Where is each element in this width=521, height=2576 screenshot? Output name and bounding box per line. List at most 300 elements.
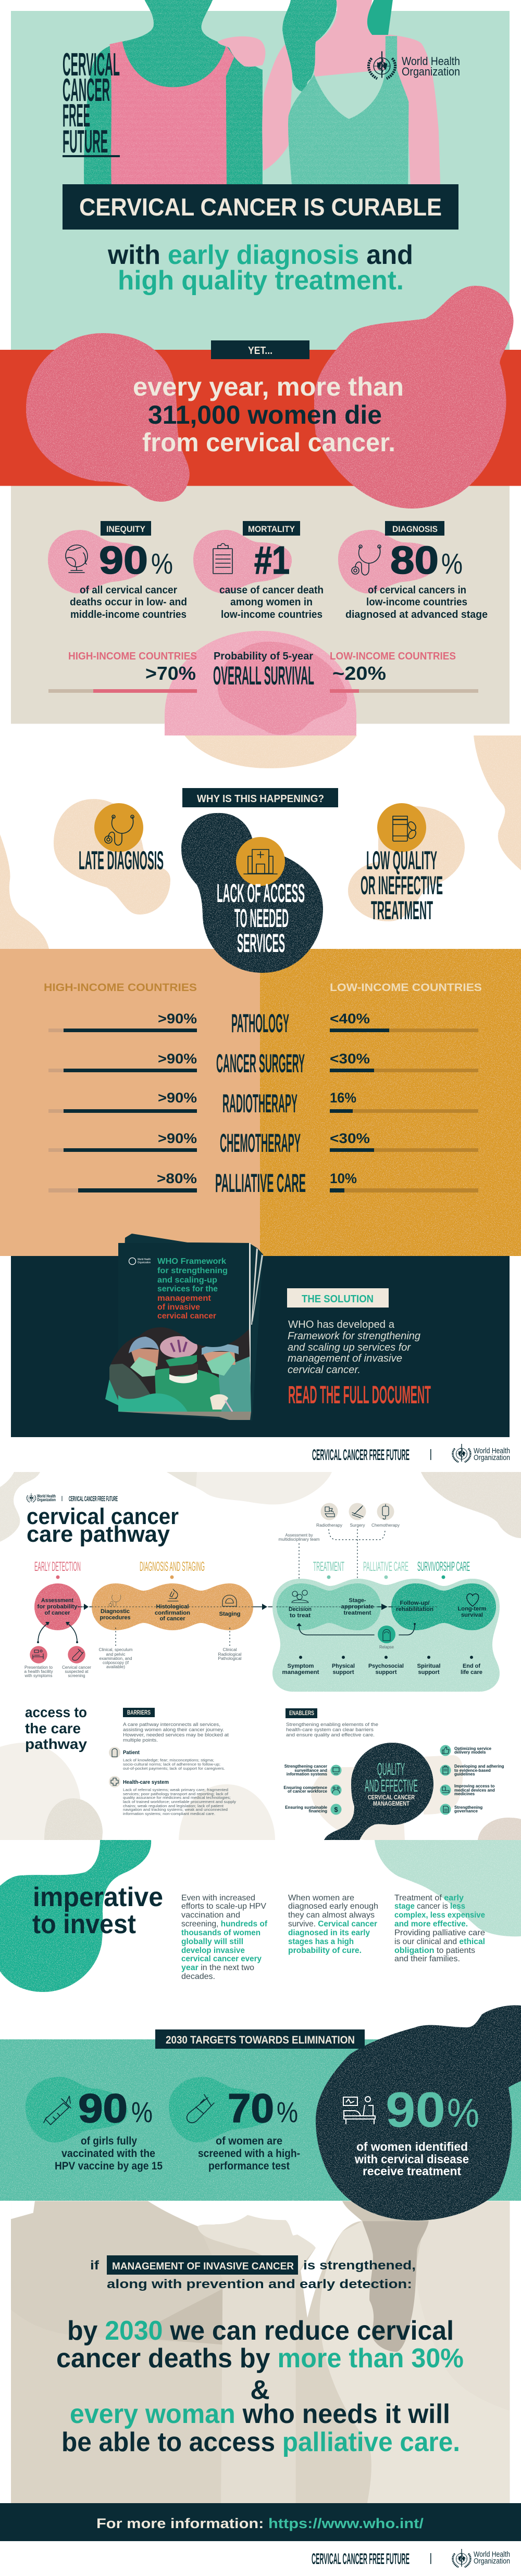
row: chemotherapy xyxy=(48,1128,478,1158)
yet tag xyxy=(211,340,309,359)
section: closing beige panel xyxy=(0,2005,521,2568)
stat: inequity: 90 xyxy=(99,538,148,582)
icon: radiotherapy machine xyxy=(325,1507,334,1517)
captions: Presentation to xyxy=(24,1665,53,1670)
stat: diagnosis: 80 xyxy=(390,538,439,582)
treatment, palliative and survivorship blob: treatment xyxy=(344,1610,371,1616)
conditional statement: along with prevention and early detection: xyxy=(107,2277,412,2291)
book title: services for the xyxy=(157,1285,218,1293)
invest title xyxy=(32,1882,163,1939)
palliative care items xyxy=(282,1656,482,1676)
book teal wave xyxy=(118,1393,188,1412)
enabler items right: Developing and adhering xyxy=(454,1764,504,1769)
row: pathology xyxy=(48,1009,478,1038)
stage headers: PALLIATIVE CARE xyxy=(363,1559,408,1574)
barrier: patient xyxy=(109,1747,225,1771)
treatment options xyxy=(278,1503,400,1588)
quality and effective blob xyxy=(324,1743,433,1840)
icon: stethoscope xyxy=(352,545,381,575)
bar: high income survival xyxy=(48,689,197,693)
stat: diagnosis: % xyxy=(441,547,463,580)
enabler items right: to evidence-based xyxy=(454,1768,491,1773)
barrier: health-care system: Health-care system xyxy=(123,1779,169,1785)
row: cancer surgery: >90% xyxy=(158,1051,197,1067)
book title: cervical cancer xyxy=(157,1312,216,1321)
stat: inequity: of all cervical cancer xyxy=(80,585,177,596)
dark blob: treatment target: receive treatment xyxy=(363,2164,461,2178)
book title: of invasive xyxy=(157,1303,200,1312)
light pink arch xyxy=(165,631,356,735)
cause: lack of access blob: TO NEEDED xyxy=(234,904,289,933)
small header xyxy=(27,1493,118,1503)
icon: heart xyxy=(467,1594,479,1606)
peach blob left edge xyxy=(0,834,49,949)
palliative care items: Physical xyxy=(332,1663,355,1669)
enabler items left: financing xyxy=(308,1809,327,1813)
icon: scalpel xyxy=(352,1506,363,1518)
stage headers: TREATMENT xyxy=(313,1559,344,1574)
text column 3: and their families. xyxy=(394,1955,460,1963)
enablers column: health-care system can clear barriers xyxy=(286,1727,374,1733)
captions: suspected at xyxy=(65,1669,89,1674)
early detection group: for probability xyxy=(38,1604,78,1610)
captions xyxy=(24,1665,91,1678)
dark blob: treatment target: % xyxy=(447,2090,479,2136)
icon: care team xyxy=(292,1590,308,1603)
stat: diagnosis: diagnosed at advanced stage xyxy=(345,609,488,620)
target: HPV vaccination xyxy=(26,2077,163,2172)
section: hero xyxy=(11,0,510,350)
barriers column: multiple points. xyxy=(123,1737,158,1743)
section: hero: CANCER xyxy=(63,72,110,108)
book title: for strengthening xyxy=(157,1266,228,1275)
footer strip with logo: World Health xyxy=(474,1446,510,1455)
quality and effective blob: MANAGEMENT xyxy=(373,1800,410,1807)
arrow: symptoms to assessment xyxy=(37,1622,49,1643)
section: survival comparison: LOW-INCOME COUNTRIES xyxy=(330,651,456,662)
barrier: patient: Patient xyxy=(123,1749,140,1756)
deaths statement text: from cervical cancer. xyxy=(142,428,395,457)
text column 3: complex, less expensive xyxy=(394,1911,485,1920)
text column 2: survive. Cervical cancer xyxy=(288,1920,377,1928)
section: survival comparison: Probability of 5-year xyxy=(214,651,313,662)
target: screening: performance test xyxy=(208,2160,290,2172)
icon: hospital xyxy=(244,849,277,874)
closing goals: be able to access palliative care. xyxy=(61,2427,460,2457)
enablers column: Strengthening enabling elements of the xyxy=(286,1722,378,1728)
cause: low quality treatment xyxy=(348,803,465,925)
deaths statement text: 311,000 women die xyxy=(148,400,382,429)
icon: globe xyxy=(66,545,88,573)
solution paragraph xyxy=(288,1319,420,1376)
solution tag xyxy=(287,1288,389,1308)
row: palliative care: PALLIATIVE CARE xyxy=(215,1169,306,1198)
WHO logo xyxy=(368,51,460,79)
palliative care items: support xyxy=(418,1669,440,1676)
text column 1: thousands of women xyxy=(181,1928,260,1937)
enabler items left: Strengthening cancer xyxy=(284,1764,327,1769)
treatment options: multidisciplinary team xyxy=(278,1537,320,1542)
stage headers: EARLY DETECTION xyxy=(34,1559,81,1574)
row: radiotherapy: >90% xyxy=(158,1090,197,1106)
stat: mortality xyxy=(193,521,324,620)
treatment, palliative and survivorship blob: appropriate xyxy=(341,1604,374,1610)
dark blob: treatment target: with cervical disease xyxy=(354,2152,469,2166)
barriers column xyxy=(109,1708,236,1816)
early detection group: Assessment xyxy=(41,1597,73,1604)
enabler items left: of cancer workforce xyxy=(288,1789,328,1794)
barrier: health-care system: information systems; non-compliant medical care. xyxy=(123,1811,215,1816)
early detection group: of cancer xyxy=(45,1610,70,1616)
section: survival comparison: >70% xyxy=(145,663,196,684)
target: HPV vaccination: of girls fully xyxy=(81,2135,137,2147)
enablers column: ENABLERS xyxy=(289,1709,314,1717)
stage headers xyxy=(34,1559,470,1579)
stat: inequity: % xyxy=(151,547,173,580)
bar: low income survival xyxy=(330,689,478,693)
target: HPV vaccination: % xyxy=(131,2096,153,2128)
text column 3: Providing palliative care xyxy=(394,1928,485,1937)
book logo xyxy=(129,1258,151,1265)
section: survival comparison: OVERALL SURVIVAL xyxy=(213,661,314,690)
diagnosis and staging group: Diagnostic xyxy=(101,1608,130,1615)
palliative care items: End of xyxy=(463,1663,480,1669)
barriers column: assisting women along their cancer journey. xyxy=(123,1727,224,1733)
stat: mortality: among women in xyxy=(230,597,313,608)
quality and effective blob: AND EFFECTIVE xyxy=(365,1776,418,1795)
small header: World Health xyxy=(37,1494,56,1499)
heading tag xyxy=(182,788,338,807)
stat: mortality: MORTALITY xyxy=(248,524,295,534)
solution tag: THE SOLUTION xyxy=(302,1293,374,1305)
cause: late diagnosis xyxy=(54,799,170,915)
enabler items right: governance xyxy=(454,1809,478,1813)
closing goals: cancer deaths by more than 30% xyxy=(56,2343,464,2374)
section: care pathway xyxy=(0,1472,521,1692)
captions: screening xyxy=(68,1673,85,1678)
barrier: health-care system: chains; weak regulation and legislation; lack of patient xyxy=(123,1804,224,1808)
campaign wordmark xyxy=(63,47,120,160)
row: pathology: PATHOLOGY xyxy=(231,1009,289,1038)
section: hero: CERVICAL xyxy=(63,47,120,83)
book title xyxy=(157,1257,228,1321)
icon: stethoscope xyxy=(109,1595,121,1607)
access title: the care xyxy=(25,1720,81,1736)
cause: lack of access blob: SERVICES xyxy=(237,929,285,958)
row: cancer surgery: CANCER SURGERY xyxy=(216,1049,305,1078)
stat: mortality: cause of cancer death xyxy=(219,585,324,596)
text column 1 xyxy=(181,1894,268,1981)
conditional statement: MANAGEMENT OF INVASIVE CANCER xyxy=(112,2261,294,2272)
icon: drip bag xyxy=(382,1504,389,1519)
barrier: patient: out-of-pocket payments; lack of support for caregivers. xyxy=(123,1766,225,1771)
row: chemotherapy: <30% xyxy=(330,1131,370,1146)
target: HPV vaccination: 90 xyxy=(78,2085,128,2131)
dark blob: treatment target xyxy=(316,2005,521,2220)
treatment options: Assessment by xyxy=(286,1533,313,1538)
diagnosis and staging group: Radiological xyxy=(218,1652,242,1657)
WHO framework book xyxy=(105,1234,263,1420)
enabler items left: Ensuring competence xyxy=(283,1785,328,1790)
diagnosis and staging group: procedures xyxy=(100,1615,130,1621)
headline banner xyxy=(63,184,458,230)
text column 3 xyxy=(394,1894,485,1963)
icon: stethoscope xyxy=(105,815,134,845)
text column 1: Even with increased xyxy=(181,1894,255,1902)
targets band xyxy=(0,2039,521,2201)
stat: mortality: low-income countries xyxy=(221,609,322,620)
arrow: assessment to diagnosis xyxy=(78,1604,92,1610)
book title: and scaling-up xyxy=(157,1276,217,1285)
enabler items left xyxy=(283,1764,342,1814)
enabler items right: Improving access to xyxy=(454,1784,494,1788)
text column 3: is our clinical and ethical xyxy=(394,1937,485,1946)
section: service availability comparison: LACK OF ACCESS xyxy=(217,879,305,908)
row: radiotherapy: RADIOTHERAPY xyxy=(222,1089,297,1118)
diagnosis and staging group: examination, and xyxy=(99,1656,132,1661)
text column 2: diagnosed early enough xyxy=(288,1902,378,1911)
row: palliative care: >80% xyxy=(157,1171,197,1186)
solution paragraph: management of invasive xyxy=(288,1353,402,1364)
stage headers: DIAGNOSIS AND STAGING xyxy=(140,1559,205,1574)
deaths statement text xyxy=(133,372,404,457)
row: chemotherapy: >90% xyxy=(158,1131,197,1146)
diagnosis and staging group: confirmation xyxy=(155,1610,190,1616)
book logo: World Health xyxy=(138,1258,151,1261)
target: screening: of women are xyxy=(216,2135,282,2147)
enabler items right: medicines xyxy=(454,1792,475,1796)
subheadline: with early diagnosis and xyxy=(107,240,413,270)
quality and effective blob: CERVICAL CANCER xyxy=(368,1794,415,1801)
arrow between treatment and survivorship xyxy=(378,1604,391,1610)
background circles xyxy=(0,1743,521,1840)
barriers column: A care pathway interconnects all services, xyxy=(123,1722,220,1728)
enabler items left: $ xyxy=(334,1806,338,1813)
conditional statement: is strengthened, xyxy=(303,2258,416,2273)
icon: presentation bed xyxy=(33,1650,43,1659)
pathway title: cervical cancer xyxy=(27,1504,179,1529)
invest title: to invest xyxy=(32,1909,136,1939)
red band xyxy=(0,350,521,486)
icon: syringe xyxy=(44,2096,71,2125)
captions: Cervical cancer xyxy=(62,1665,91,1670)
row: cancer surgery xyxy=(48,1049,478,1078)
more information bar: For more information: https://www.who.int/ xyxy=(96,2516,424,2531)
text column 3: obligation to patients xyxy=(394,1946,475,1955)
row: chemotherapy: CHEMOTHERAPY xyxy=(220,1128,301,1158)
subheadline xyxy=(107,240,413,296)
access title: access to xyxy=(25,1704,87,1720)
target: screening xyxy=(169,2077,300,2172)
icon: patient in bed xyxy=(343,2097,375,2124)
peach blob top xyxy=(184,735,357,768)
enabler items right: guidelines xyxy=(454,1772,475,1776)
barrier: health-care system: Lack of referral systems; weak primary care; fragmented xyxy=(123,1787,228,1792)
palliative care items: management xyxy=(282,1669,319,1676)
diagnosis and staging group: available) xyxy=(106,1665,125,1669)
icon: test tube xyxy=(72,1649,83,1660)
section: survival comparison: ~20% xyxy=(332,663,386,684)
arrow: staging to treatment xyxy=(253,1604,276,1610)
text column 3: and more effective. xyxy=(394,1920,468,1928)
diagnosis and staging group: Staging xyxy=(219,1611,241,1617)
deaths statement text: every year, more than xyxy=(133,372,404,401)
stat: inequity: deaths occur in low- and xyxy=(70,597,187,608)
barrier: health-care system xyxy=(109,1776,236,1816)
early detection group xyxy=(24,1583,91,1678)
row: palliative care: 10% xyxy=(330,1171,357,1186)
pathway title xyxy=(27,1504,179,1547)
section: survival comparison xyxy=(48,631,478,735)
stat: inequity: middle-income countries xyxy=(70,609,187,620)
invest title: imperative xyxy=(33,1882,163,1912)
diagnosis and staging group: Clinical, speculum xyxy=(99,1647,133,1652)
target: screening: % xyxy=(277,2096,298,2128)
targets heading xyxy=(155,2029,365,2049)
treatment options: Radiotherapy xyxy=(316,1523,342,1528)
blob: treatment xyxy=(277,1583,381,1630)
diagnosis and staging group: Pathological xyxy=(218,1656,242,1661)
bottom footer with logo: World Health xyxy=(474,2550,510,2559)
WHO logo: Organization xyxy=(402,65,460,78)
treatment options: Chemotherapy xyxy=(371,1523,400,1528)
section: yet, deaths statement xyxy=(0,286,521,724)
text column 2: stages has a high xyxy=(288,1937,354,1946)
closing goals: every woman who needs it will xyxy=(70,2399,450,2429)
target: screening: screened with a high- xyxy=(198,2148,300,2160)
text column 1: year in the next two xyxy=(181,1963,254,1972)
barriers column: BARRIERS xyxy=(127,1709,151,1716)
treatment, palliative and survivorship blob xyxy=(272,1579,500,1692)
text column 2: they can almost always xyxy=(288,1911,375,1920)
text column 1: decades. xyxy=(181,1972,215,1981)
captions: a health facility xyxy=(24,1669,53,1674)
heading tag: WHY IS THIS HAPPENING? xyxy=(197,793,324,805)
palliative care items: Spiritual xyxy=(417,1663,441,1669)
treatment options: Surgery xyxy=(350,1523,365,1528)
treatment, palliative and survivorship blob: rehabilitation xyxy=(396,1606,433,1613)
beige stats panel xyxy=(11,486,510,724)
diagnosis and staging group: colposcopy (if xyxy=(103,1660,129,1665)
book logo: Organization xyxy=(138,1261,151,1264)
enabler items left: information systems xyxy=(287,1772,328,1776)
diagnosis and staging group: of cancer xyxy=(159,1616,185,1622)
campaign wordmark: FREE xyxy=(63,98,90,134)
enablers column: and ensure quality and effective care. xyxy=(286,1732,375,1738)
diagnosis and staging group: Histological xyxy=(156,1604,189,1610)
section: service availability comparison: LOW-INCOME COUNTRIES xyxy=(330,982,482,994)
treatment, palliative and survivorship blob: Long-term xyxy=(457,1606,487,1612)
section: imperative to invest xyxy=(0,1840,521,1992)
barrier: health-care system: lack of trained workforce; unreliable procurement and supply xyxy=(123,1799,236,1804)
palliative care items: Psychosocial xyxy=(368,1663,404,1669)
section: survival comparison: HIGH-INCOME COUNTRIES xyxy=(68,651,197,662)
enabler items right: delivery models xyxy=(454,1750,486,1755)
enabler items right: Optimizing service xyxy=(454,1746,492,1751)
small header: Organization xyxy=(37,1498,56,1502)
treatment, palliative and survivorship blob: Decision xyxy=(289,1606,312,1613)
diagnosis and staging group xyxy=(92,1583,253,1669)
book title: management xyxy=(157,1294,212,1303)
stat: diagnosis: of cervical cancers in xyxy=(368,585,466,596)
treatment, palliative and survivorship blob: survival xyxy=(461,1612,483,1618)
text column 1: screening, hundreds of xyxy=(181,1920,268,1928)
text column 3: stage cancer is less xyxy=(394,1902,465,1911)
footer strip with logo: Organization xyxy=(474,1453,510,1462)
section: service availability comparison xyxy=(0,813,521,1256)
section: access to the care pathway xyxy=(0,1704,521,1840)
solution paragraph: and scaling up services for xyxy=(288,1342,411,1353)
text column 1: develop invasive xyxy=(181,1946,245,1955)
section: the solution xyxy=(11,1234,510,1437)
pathway title: care pathway xyxy=(27,1521,170,1547)
icon: test tube xyxy=(187,2095,214,2123)
row: pathology: >90% xyxy=(158,1011,197,1026)
section: service availability comparison: HIGH-INCOME COUNTRIES xyxy=(44,982,197,994)
target: HPV vaccination: vaccinated with the xyxy=(61,2148,155,2160)
subheadline: high quality treatment. xyxy=(118,265,404,296)
more information bar xyxy=(0,2503,521,2541)
row: cancer surgery: <30% xyxy=(330,1051,370,1067)
blob: survivorship xyxy=(391,1583,496,1630)
section: hero: FUTURE xyxy=(63,124,108,160)
high income panel xyxy=(0,949,260,1256)
section: why is this happening xyxy=(0,735,521,949)
palliative care items: support xyxy=(332,1669,354,1676)
barrier: patient: Lack of knowledge; fear; misconceptions; stigma; xyxy=(123,1758,214,1762)
text column 1: efforts to scale-up HPV xyxy=(181,1902,266,1911)
pink blob right xyxy=(314,286,514,509)
target: screening: 70 xyxy=(228,2085,274,2131)
enabler items left: Ensuring sustainable xyxy=(285,1805,328,1810)
solution paragraph: WHO has developed a xyxy=(288,1319,395,1330)
barrier: patient: socio-cultural norms; lack of adherence to follow-up; xyxy=(123,1762,220,1767)
text column 1: vaccination and xyxy=(181,1911,240,1920)
barriers column: However, needed services may be blocked at xyxy=(123,1732,229,1738)
palliative care items: life care xyxy=(461,1669,482,1676)
diagnosis and staging group: and pelvic xyxy=(106,1652,125,1657)
background blobs xyxy=(0,1472,521,1542)
pink blob left xyxy=(26,333,190,502)
low income panel xyxy=(260,949,521,1256)
enabler items right: medical devices and xyxy=(454,1788,495,1793)
WHO logo: World Health xyxy=(402,55,460,68)
access title: pathway xyxy=(25,1736,87,1752)
icon: pill bottle xyxy=(393,816,417,841)
stat: mortality: #1 xyxy=(254,538,290,582)
text column 2: When women are xyxy=(288,1894,354,1902)
access title xyxy=(25,1704,87,1752)
treatment, palliative and survivorship blob: Follow-up/ xyxy=(400,1600,429,1606)
row: radiotherapy xyxy=(48,1089,478,1118)
text column 2 xyxy=(288,1894,378,1955)
target: HPV vaccination: HPV vaccine by age 15 xyxy=(55,2160,163,2172)
stat: diagnosis: DIAGNOSIS xyxy=(392,524,438,534)
row: palliative care xyxy=(48,1169,478,1198)
captions: with symptoms xyxy=(24,1673,52,1678)
enabler items left: surveillance and xyxy=(294,1768,327,1773)
targets heading: 2030 TARGETS TOWARDS ELIMINATION xyxy=(166,2034,355,2046)
bottom footer with logo: Organization xyxy=(474,2557,510,2566)
dark blob: treatment target: of women identified xyxy=(356,2140,468,2153)
diagnosis and staging group: Clinical xyxy=(223,1647,237,1652)
palliative care items: support xyxy=(375,1669,397,1676)
closing goals: & xyxy=(250,2375,270,2405)
relapse loop: Relapse xyxy=(379,1645,394,1649)
mint blob xyxy=(375,1840,521,1936)
row: pathology: <40% xyxy=(330,1011,370,1026)
teal blob xyxy=(0,1840,151,1992)
